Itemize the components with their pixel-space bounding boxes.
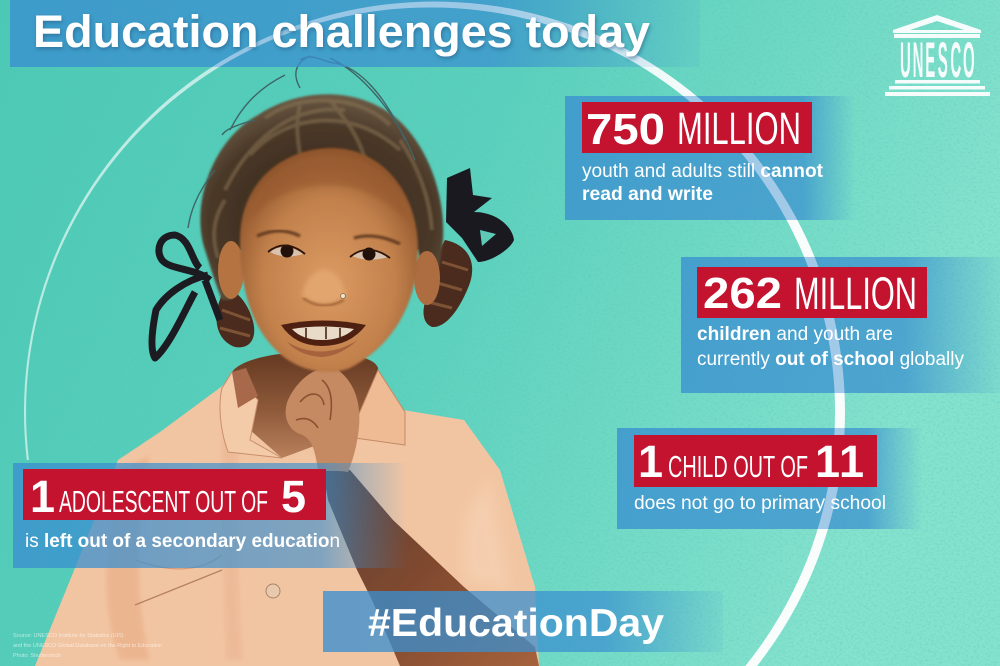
nose and stud	[302, 270, 346, 306]
figure 5: 5	[281, 471, 306, 522]
unit: ADOLESCENT OUT OF	[59, 484, 268, 519]
stat: 1 child out of 11	[634, 435, 886, 514]
unit: MILLION	[677, 103, 801, 154]
figure: 750	[586, 105, 665, 154]
figure: 262	[703, 269, 782, 318]
ribbon left	[152, 235, 220, 358]
stat: 750 million	[582, 102, 824, 182]
eyebrows	[257, 231, 400, 244]
collar	[220, 368, 405, 458]
smile	[281, 320, 366, 357]
description line 2: currently out of school globally	[697, 349, 964, 370]
description: is left out of a secondary education	[25, 531, 340, 552]
panel: adolescent background	[13, 463, 408, 568]
figure 11: 11	[815, 436, 864, 487]
source credits	[13, 633, 162, 659]
photo: smiling girl	[35, 56, 539, 666]
panel: hashtag background	[323, 591, 723, 652]
hand on chin	[286, 368, 359, 472]
stat: 1 adolescent out of 5	[23, 469, 340, 552]
panel: 262 million background	[681, 257, 1000, 393]
logo: UNESCO temple	[885, 15, 990, 96]
braids	[216, 240, 472, 347]
description: youth and adults still cannot	[582, 161, 824, 182]
stat: 262 million	[697, 267, 927, 345]
eyes	[268, 244, 390, 260]
source credits: Source: UNESCO Institute for Statistics (UIS)	[13, 633, 124, 639]
button	[266, 584, 280, 598]
source credits: Photo: Shutterstock	[13, 653, 61, 659]
circle ring highlight through panels	[212, 2, 845, 529]
face	[240, 148, 418, 372]
description line 2: read and write	[582, 184, 713, 205]
red banner	[23, 469, 326, 520]
source credits: and the UNESCO Global Database on the Right to Education	[13, 643, 162, 649]
panel: 1 child background	[617, 428, 922, 529]
panel: 750 million background	[565, 96, 855, 220]
ribbon right	[446, 168, 514, 262]
figure 1: 1	[30, 471, 55, 522]
hashtag: #EducationDay	[368, 602, 664, 645]
hair	[188, 56, 443, 300]
logo: UNESCO temple: UNESCO	[900, 32, 975, 88]
red banner	[697, 267, 927, 318]
neck	[232, 352, 378, 458]
description: does not go to primary school	[634, 493, 886, 514]
unit: MILLION	[794, 268, 917, 319]
unit: CHILD OUT OF	[668, 449, 808, 484]
description: children and youth are	[697, 324, 893, 345]
red banner	[634, 435, 877, 487]
arm	[322, 465, 539, 666]
panel: title band	[10, 0, 700, 67]
figure 1: 1	[638, 436, 663, 487]
red banner	[582, 102, 812, 153]
title: Education challenges today	[33, 6, 650, 57]
shirt	[35, 370, 539, 666]
ears	[218, 241, 244, 299]
